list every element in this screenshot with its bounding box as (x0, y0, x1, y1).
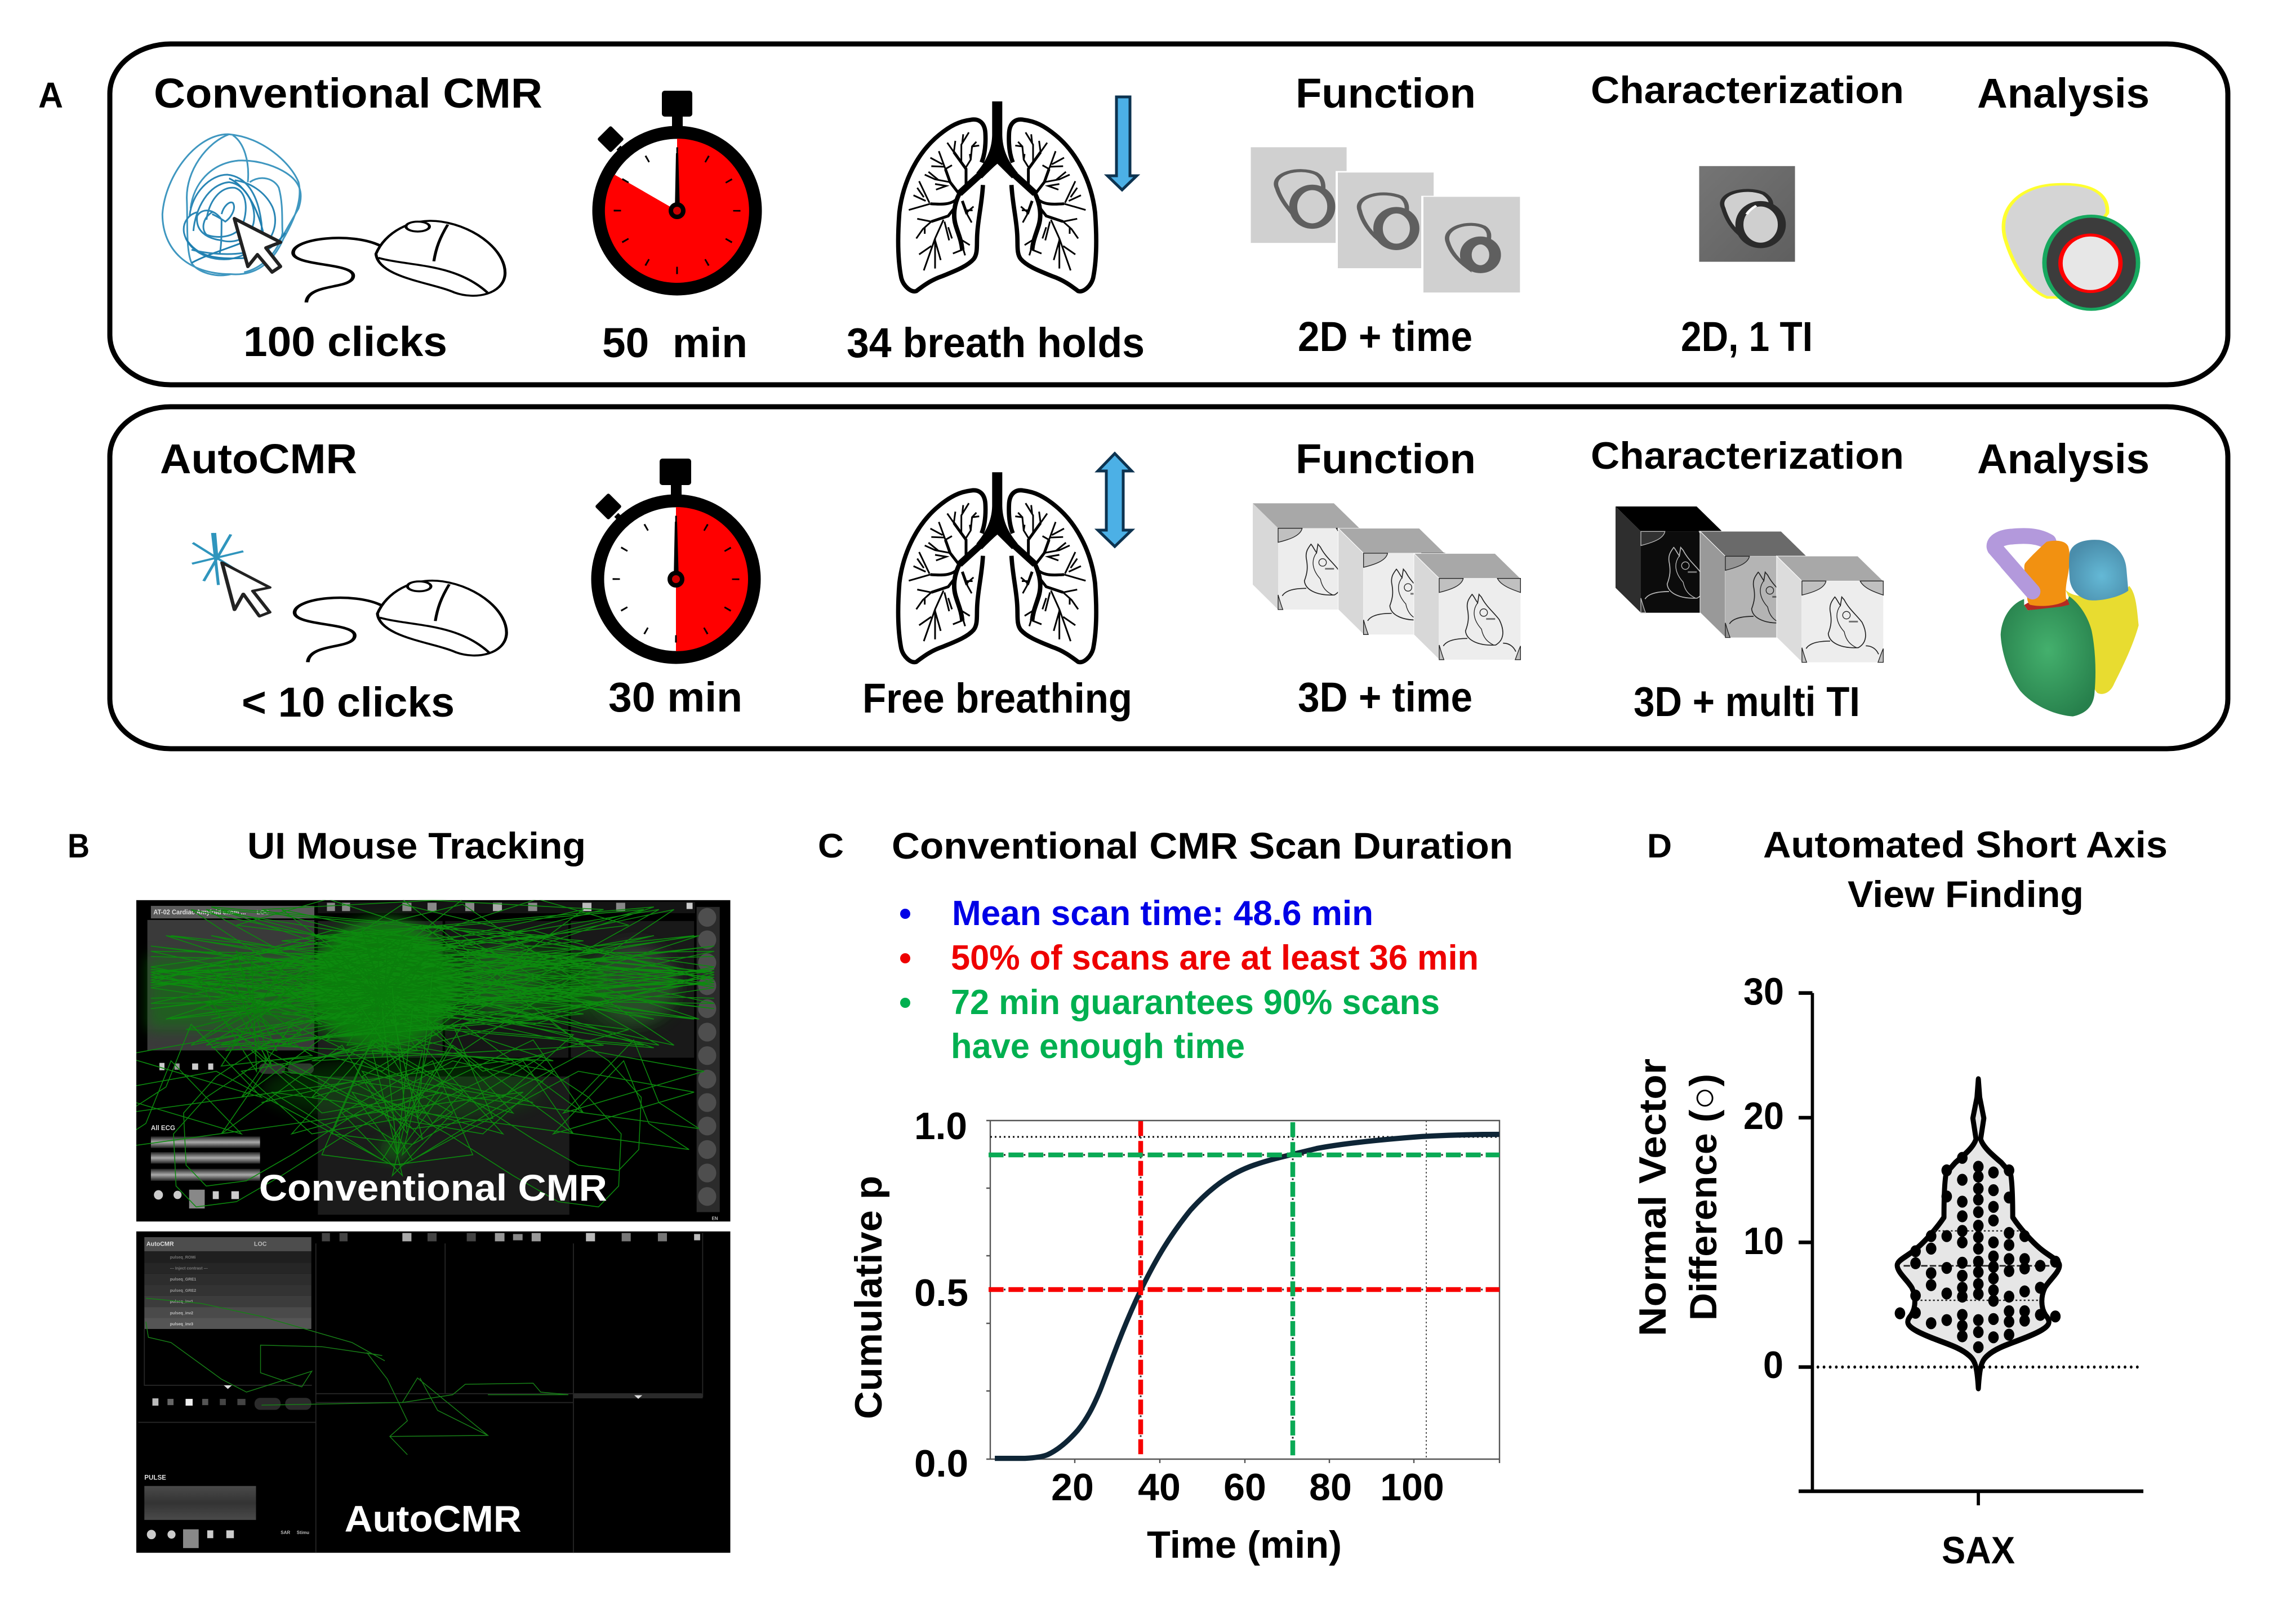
plot frame and ticks (986, 1121, 1499, 1463)
console interface: pulseq_inv1 (170, 1299, 193, 1304)
cumulative curve (995, 1135, 1499, 1459)
heading: Analysis: Analysis (1977, 435, 2150, 482)
x axis labels: 80 (1309, 1466, 1352, 1509)
label: < 10 clicks: < 10 clicks (242, 679, 455, 726)
heading: Automated Short Axis View Finding: View Finding (1848, 873, 2084, 915)
heading: Characterization: Characterization (1591, 434, 1904, 477)
heading: Characterization: Characterization (1591, 69, 1904, 112)
bullet: 90th percentile scan time: have enough time (951, 1027, 1245, 1066)
icon: 3D whole-heart segmentation (1995, 536, 2139, 717)
overlay label: AutoCMR: AutoCMR (345, 1497, 522, 1539)
console interface: pulseq_GRE1 (170, 1277, 196, 1282)
heading: AutoCMR: AutoCMR (160, 435, 357, 482)
console interface: pulseq_ROMi (170, 1255, 195, 1260)
bullet: 90th percentile scan time: 72 min guarantees 90% scans (951, 983, 1440, 1022)
panel A: conventional CMR workflow (110, 44, 2228, 385)
console interface: All ECG (151, 1124, 175, 1132)
conventional panel border (110, 44, 2228, 385)
quartile and median lines (1916, 1231, 2040, 1300)
axes (1799, 993, 2143, 1505)
label: 30 min: 30 min (608, 674, 742, 721)
y axis labels (914, 1105, 968, 1485)
heading: Automated Short Axis View Finding (1763, 824, 2168, 915)
icon: blue mouse scribble (162, 134, 301, 275)
console interface: AutoCMR (146, 1241, 174, 1248)
y axis title: Cumulative p (847, 1176, 890, 1419)
console interface: LOC (256, 909, 269, 916)
chart D: violin plot of normal vector difference (1631, 970, 2143, 1572)
x axis labels: 20 (1051, 1466, 1094, 1509)
heading: Analysis: Analysis (1977, 70, 2150, 117)
mouse trajectory traces (146, 1298, 568, 1455)
icon: blue click burst (192, 533, 243, 585)
arrow: breath hold, down (1107, 97, 1137, 190)
x axis labels: 60 (1223, 1466, 1266, 1509)
panel label D: D (1647, 827, 1672, 865)
y axis labels (1743, 970, 1784, 1386)
icon: lungs (898, 472, 1096, 662)
console interface: EN (711, 1216, 718, 1221)
console interface: SAR (281, 1530, 290, 1535)
label: Free breathing: Free breathing (862, 675, 1132, 722)
arrow: free breathing, up and down (1098, 454, 1132, 546)
reference dotted lines (990, 1136, 1499, 1138)
icon: stopwatch 30 min (595, 459, 754, 657)
console interface: AT-02 Cardiac Amyloid exam ... (153, 909, 246, 916)
label: 3D + multi TI: 3D + multi TI (1634, 678, 1860, 725)
plot area (1799, 993, 2143, 1505)
console interface: pulseq_inv2 (170, 1310, 193, 1315)
console interface: pulseq_GRE2 (170, 1288, 196, 1293)
y axis labels: 0.0 (914, 1442, 968, 1485)
y axis title: Difference (○) (1682, 1074, 1725, 1321)
panel label C: C (818, 827, 844, 865)
heading: Automated Short Axis View Finding: Automated Short Axis (1763, 824, 2168, 865)
screen background (136, 900, 730, 1221)
bullet: median scan time: 50% of scans are at least 36 min (951, 939, 1479, 977)
icon: cursor (222, 563, 270, 616)
mouse trajectory traces (101, 883, 714, 1207)
y axis labels: 0 (1763, 1344, 1783, 1386)
heading: Conventional CMR: Conventional CMR (154, 70, 542, 117)
overlay label: Conventional CMR: Conventional CMR (259, 1167, 607, 1208)
heading: Function: Function (1296, 435, 1476, 482)
console interface: Stimu (297, 1530, 309, 1535)
icon: 2D tissue characterization frame (1699, 166, 1795, 262)
panel B: conventional CMR mouse-tracking screenshot (136, 900, 730, 1221)
zero reference line (1818, 1366, 2140, 1369)
heading: Conventional CMR Scan Duration: Conventional CMR Scan Duration (892, 825, 1513, 866)
y axis labels: 10 (1743, 1220, 1784, 1263)
x axis labels (1051, 1466, 1444, 1509)
x axis labels: 40 (1138, 1466, 1181, 1509)
y axis labels: 30 (1743, 970, 1784, 1013)
console interface: --- Inject contrast --- (170, 1265, 208, 1270)
violin shape (1897, 1079, 2059, 1389)
icon: computer mouse (295, 581, 506, 662)
red guide lines at 36 min, p = 0.5 (989, 1121, 1499, 1455)
label: 2D + time: 2D + time (1298, 313, 1472, 360)
x axis title: Time (min) (1147, 1523, 1342, 1566)
y axis labels: 20 (1743, 1095, 1784, 1137)
label: 100 clicks: 100 clicks (243, 318, 447, 365)
heading: UI Mouse Tracking: UI Mouse Tracking (247, 825, 586, 866)
icon: cursor (234, 219, 281, 272)
panel label B: B (68, 827, 90, 865)
bullet list: scan duration findings (900, 894, 1479, 1066)
panel A: AutoCMR workflow (110, 407, 2228, 749)
icon: 2D contour analysis (2004, 184, 2138, 309)
console interface: PULSE (144, 1473, 166, 1482)
console interface (148, 902, 720, 1221)
AutoCMR panel border (110, 407, 2228, 749)
console interface (139, 1233, 702, 1553)
label: 50 min: 50 min (602, 319, 747, 366)
screen background (136, 1232, 730, 1553)
plot area (986, 1121, 1499, 1463)
icon: 3D cine volumes (1253, 503, 1520, 660)
bullet: mean scan time: Mean scan time: 48.6 min (952, 894, 1373, 933)
heading: Function: Function (1296, 70, 1476, 117)
icon: 3D multi-TI volumes (1616, 506, 1883, 663)
green guide lines at 72 min, p = 0.9 (989, 1122, 1499, 1456)
y axis labels: 1.0 (914, 1105, 967, 1148)
individual scan data points (1900, 1158, 2055, 1347)
label: 34 breath holds: 34 breath holds (847, 319, 1145, 366)
y axis title (1631, 1059, 1725, 1336)
label: 3D + time: 3D + time (1298, 674, 1472, 721)
icon: lungs (898, 101, 1096, 291)
label: 2D, 1 TI: 2D, 1 TI (1681, 313, 1813, 360)
console interface: pulseq_inv3 (170, 1321, 193, 1327)
bullet: 90th percentile scan time (900, 983, 1440, 1066)
icon: 2D cine frames (1251, 147, 1521, 294)
y axis title: Normal Vector (1631, 1059, 1674, 1336)
panel B: AutoCMR mouse-tracking screenshot (136, 1232, 730, 1553)
x axis label: SAX (1942, 1529, 2015, 1572)
console interface: LOC (254, 1241, 267, 1248)
panel label A: A (38, 75, 63, 115)
y axis labels: 0.5 (914, 1272, 968, 1314)
icon: computer mouse (293, 221, 505, 303)
x axis labels: 100 (1380, 1466, 1444, 1509)
icon: stopwatch 50 min (597, 91, 755, 289)
chart C: cumulative probability of scan duration (847, 1105, 1499, 1566)
